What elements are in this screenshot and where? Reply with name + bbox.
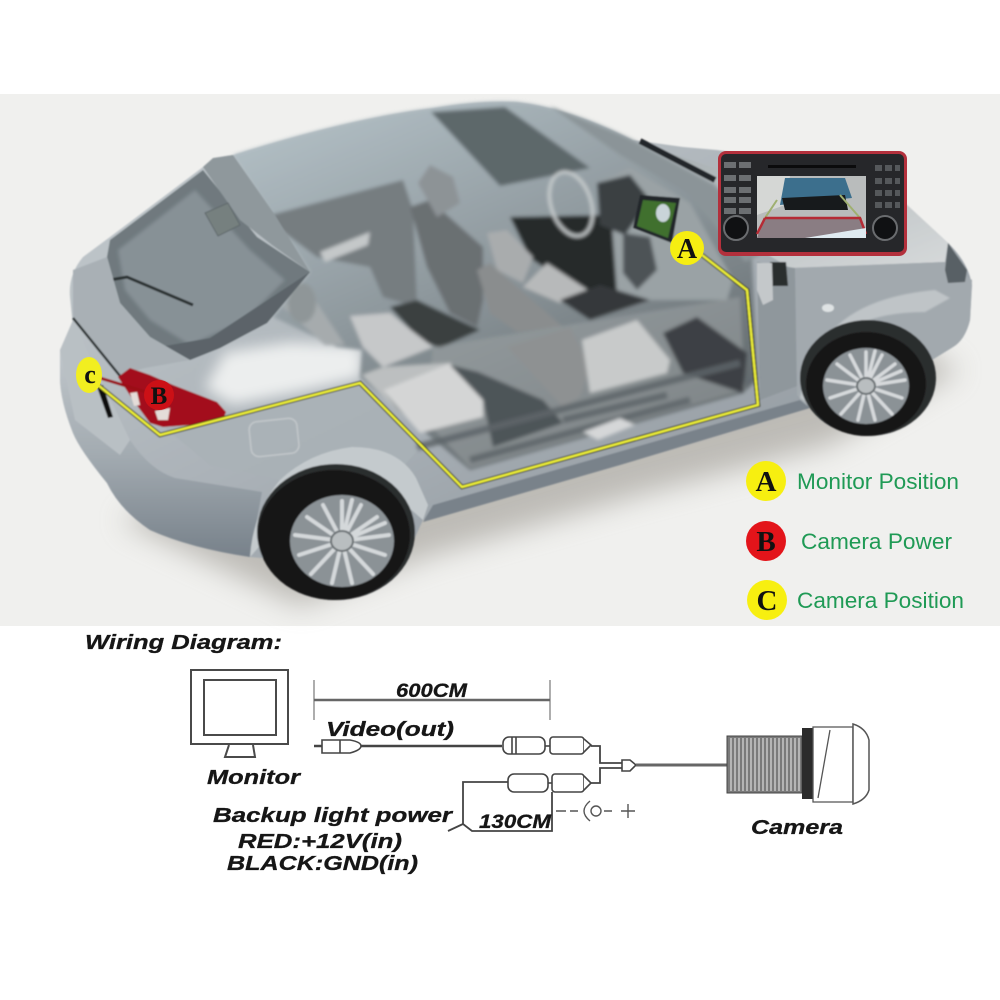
gear area [560,285,650,320]
tail light lenses [130,392,170,420]
driver seat back [477,263,563,332]
rear glass light area [118,190,285,345]
marker B [144,380,174,410]
marker C [76,357,102,393]
rear fender flare [250,447,428,557]
dark driver area [510,215,628,295]
driver headrest [487,230,533,283]
door sill bars [417,363,740,460]
legend [746,461,964,620]
licence plate recess [97,385,113,418]
legend item C [747,580,964,620]
rear seat back [350,313,433,367]
rear far headrest [418,165,460,217]
right knob [873,216,897,240]
screen [757,176,866,238]
trunk seam [73,318,120,376]
dash monitor [633,195,680,243]
front seat cushion [582,320,670,393]
yellow wiring route [98,255,758,487]
backup light power label: Backup light power [213,805,454,827]
dark rear floor [390,300,480,348]
centre console [623,233,657,290]
car illustration [60,102,972,600]
dark front footwell [663,317,747,393]
rear wheel [257,464,415,600]
black wire label: BLACK:GND(in) [227,853,418,875]
sunroof [431,107,590,186]
marker A: A [677,234,698,265]
lower sill [423,400,810,522]
wiring diagram heading: Wiring Diagram: [85,632,282,654]
ground shadow [120,340,960,606]
trunk lower panel [60,320,130,455]
fuel door [248,418,300,457]
tail light [118,368,226,427]
dashboard [597,167,733,300]
rear quarter highlight [205,342,362,405]
hood [640,143,948,268]
rear parcel shelf [283,285,345,345]
lens housing [813,727,853,802]
side indicator [822,304,834,312]
rear mirror mount [205,203,240,236]
marker C: c [84,360,96,389]
left knob [724,216,748,240]
video cable and connectors [314,737,591,754]
steering wheel [542,166,600,242]
legend item A: A [756,466,777,498]
camera lead [636,764,727,766]
legend item B [746,521,952,561]
windshield pillar [550,106,760,262]
knurled ring [802,728,813,799]
legend item A [746,461,959,501]
dash shadow [597,175,650,235]
video out label: Video(out) [326,719,454,741]
rear window [107,170,310,360]
photo panel background [0,94,1000,626]
slot [768,165,856,168]
monitor label: Monitor [207,767,302,789]
far door panel [263,180,417,307]
right buttons [875,165,900,208]
rear seat side [362,363,450,420]
red wire label: RED:+12V(in) [238,831,402,853]
threaded barrel [727,736,802,793]
y-split wires [591,746,622,783]
rear bumper [60,327,262,557]
red link line [100,378,146,392]
spoiler [203,155,310,272]
left buttons [724,162,751,214]
130CM label: 130CM [479,812,552,833]
trunk lid [73,257,190,375]
legend item A: Monitor Position [797,469,959,494]
legend item B: Camera Power [801,529,952,554]
marker B: B [151,383,167,410]
rear headrest [288,283,316,323]
door mirror [757,262,788,305]
driver seat cushion [523,263,588,303]
dark rear footwell [450,365,563,447]
front fender [795,262,972,407]
head unit inset [718,151,907,256]
front door panel [757,262,800,400]
legend item C: C [757,585,777,617]
marker A [670,231,704,265]
door step plate [583,418,635,440]
front seat back [507,327,590,407]
legend item C: Camera Position [797,588,964,613]
legend item B: B [756,526,776,558]
camera drawing [727,724,869,804]
headlight [945,243,967,283]
rear quarter panel [165,383,420,480]
yellow wiring highlight [98,255,758,487]
rear seat cushion [383,363,483,433]
inline joint [622,760,636,771]
power cable and connectors [448,774,591,831]
600CM dimension: 600CM [396,681,468,702]
dome [853,724,869,804]
car body [60,102,972,570]
monitor icon [191,670,288,757]
600CM dimension [314,680,550,720]
rear far seat back [410,200,483,327]
fender highlight [800,290,950,405]
interior [233,102,760,470]
front wheel [800,320,936,436]
power polarity symbol [556,801,635,821]
rear window lower frame [165,272,310,360]
camera label: Camera [751,817,843,839]
far door armrest [320,232,370,262]
windshield wiper strip [640,141,715,180]
translucent door panel [425,297,745,468]
rear wiper [92,277,193,305]
interior glass area [233,102,757,470]
